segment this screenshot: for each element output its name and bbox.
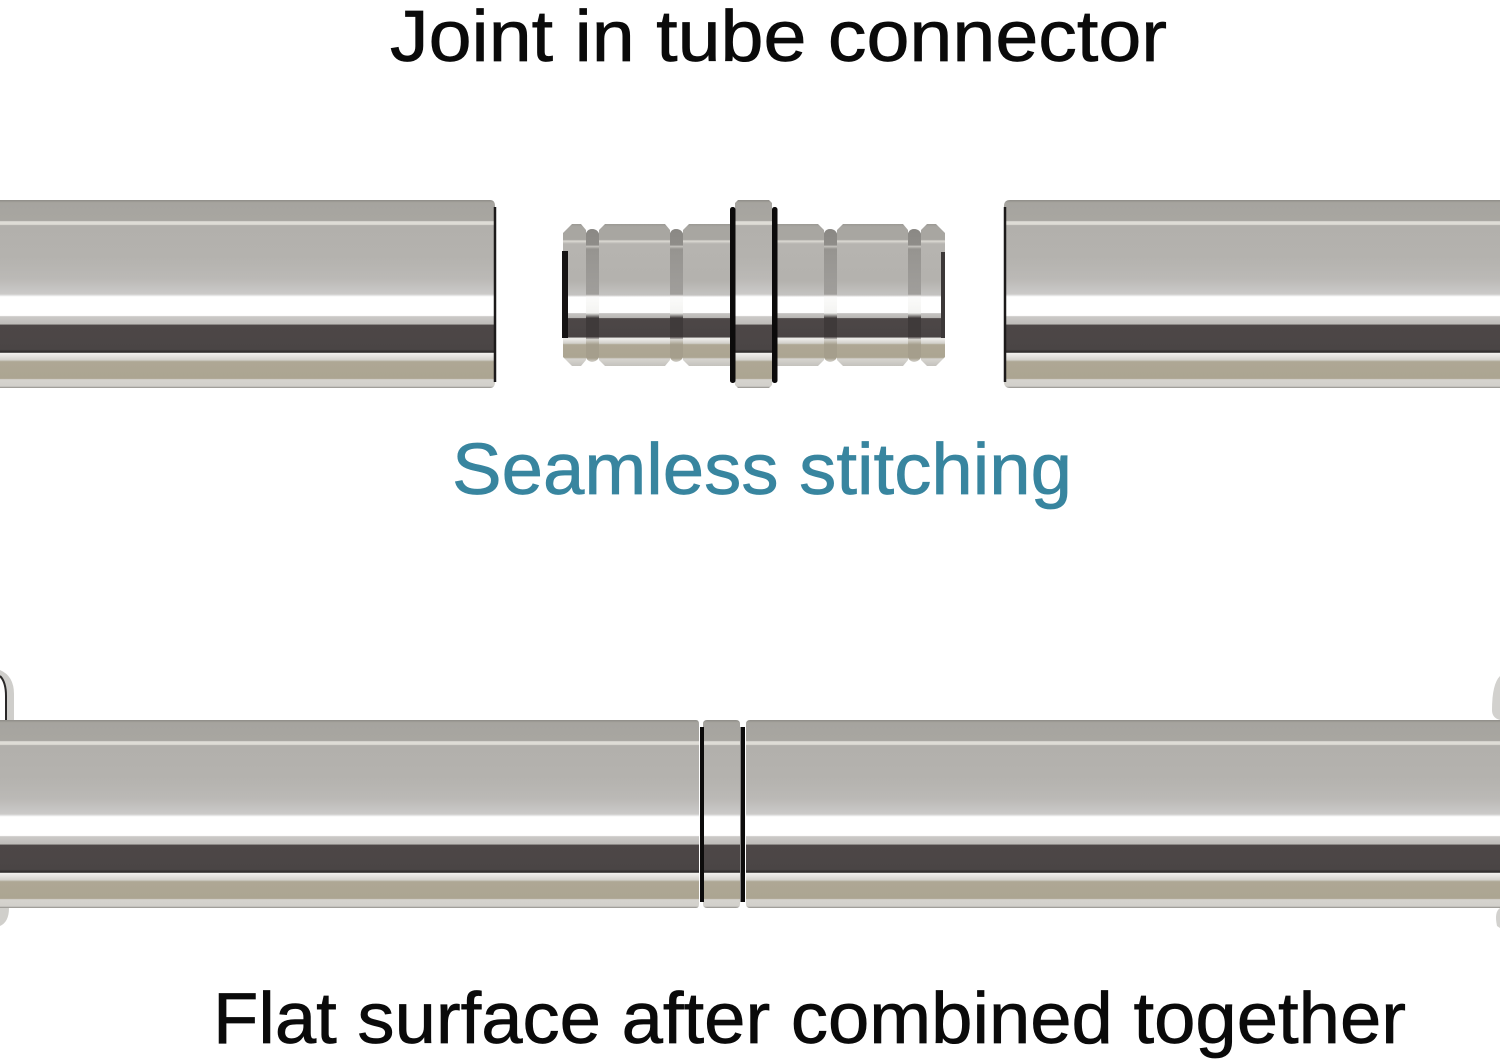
connector centre ring — [730, 200, 778, 388]
assembled rod left section — [0, 720, 699, 908]
right bracket — [1492, 676, 1500, 928]
connector — [562, 200, 945, 388]
subtitle: Seamless stitching — [452, 430, 1072, 510]
caption: Flat surface after combined together — [213, 979, 1406, 1059]
connector end openings — [562, 251, 945, 338]
left upper tube — [0, 200, 495, 388]
assembled rod right section — [746, 720, 1500, 908]
right upper tube — [1004, 200, 1500, 388]
assembled rod visible ring — [700, 720, 745, 908]
connector grooves — [585, 229, 922, 362]
connector body segments — [563, 224, 945, 366]
left bracket — [0, 670, 14, 926]
